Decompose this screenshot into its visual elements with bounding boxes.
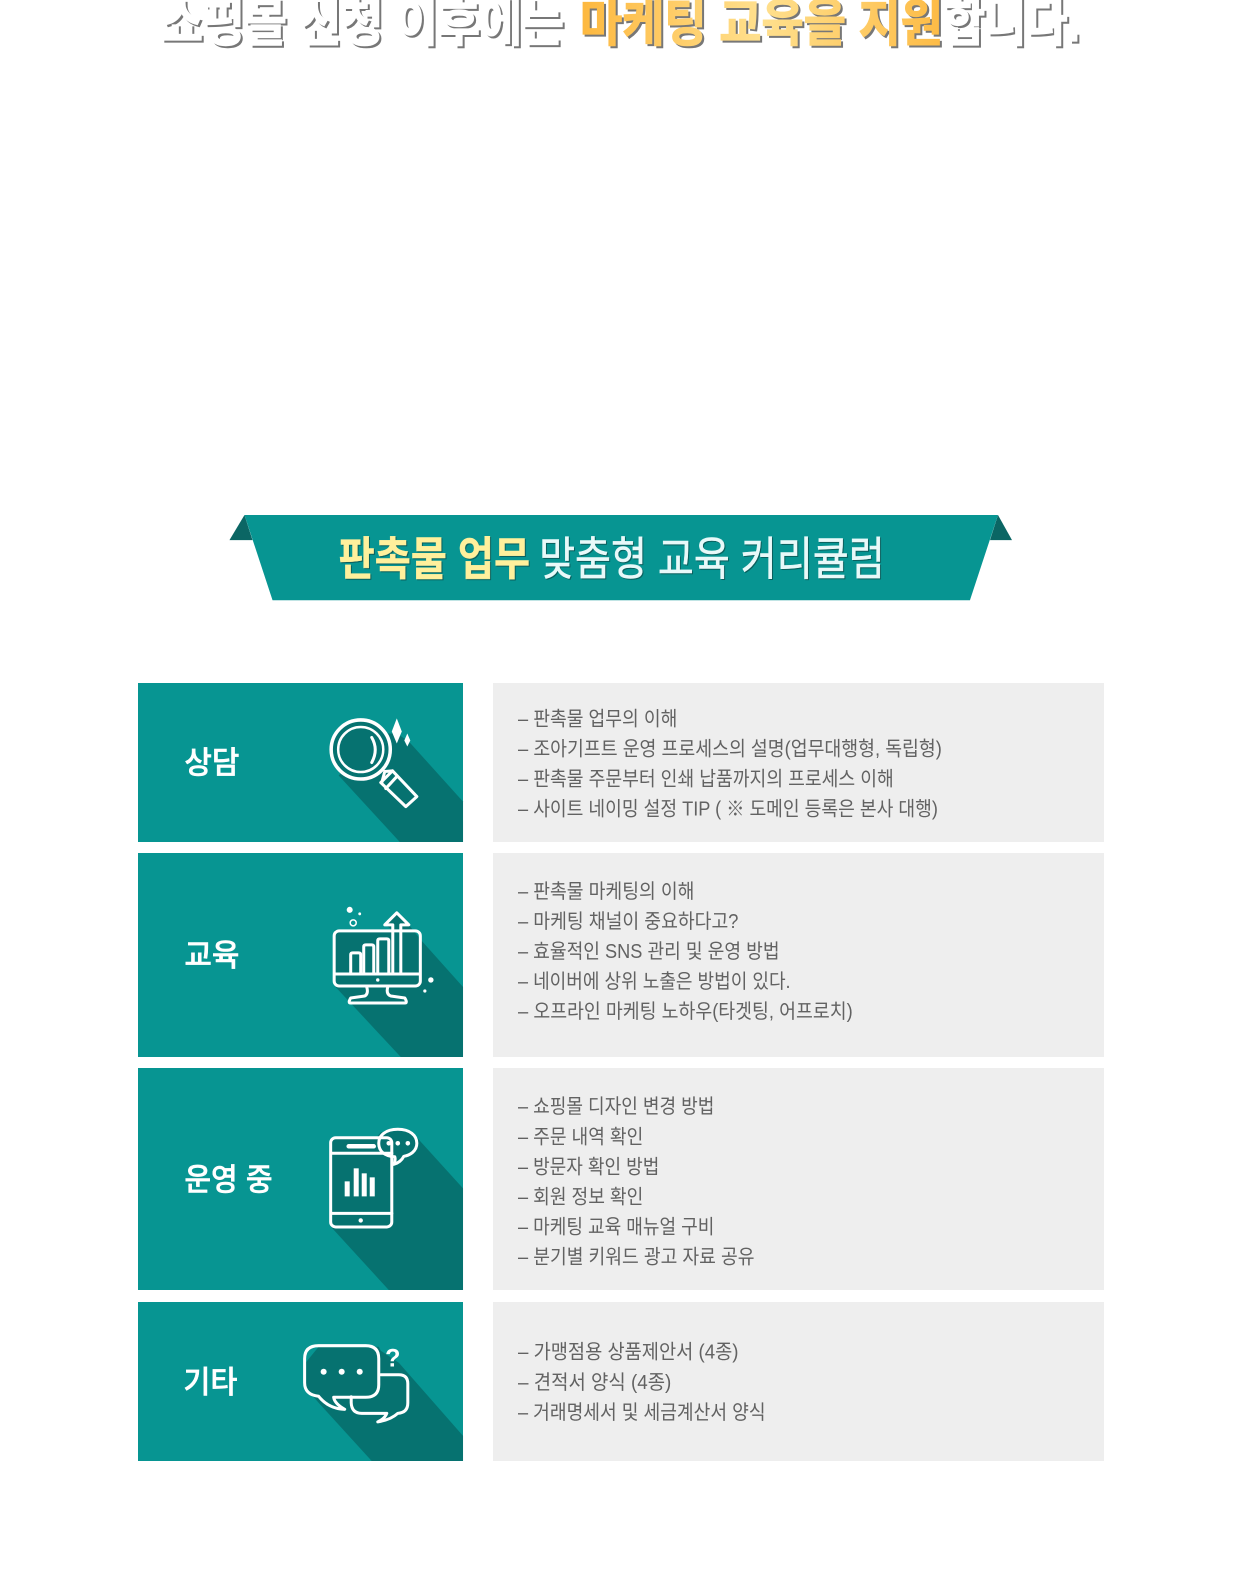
panel: 교육 list: – 오프라인 마케팅 노하우(타겟팅, 어프로치) — [518, 1000, 853, 1023]
icon: speech bubbles: ? — [385, 1345, 400, 1373]
panel: 교육 list: – 마케팅 채널이 중요하다고? — [518, 910, 738, 933]
panel: 기타 — [138, 1302, 463, 1461]
icon shadow — [335, 913, 463, 1057]
icon: magnifier — [331, 718, 417, 807]
panel: 상담 list: – 판촉물 업무의 이해 — [518, 707, 677, 730]
panel: 운영 중 list: – 방문자 확인 방법 — [518, 1155, 659, 1178]
panel: 상담 list: – 판촉물 주문부터 인쇄 납품까지의 프로세스 이해 — [518, 768, 894, 791]
panel: 운영 중 list: – 회원 정보 확인 — [518, 1185, 643, 1208]
panel: 운영 중 list: – 마케팅 교육 매뉴얼 구비 — [518, 1215, 714, 1238]
icon shadow — [306, 1347, 463, 1461]
panel: 교육 list: – 네이버에 상위 노출은 방법이 있다. — [518, 970, 791, 993]
icon: speech bubbles — [305, 1345, 408, 1422]
icon shadow — [331, 1128, 463, 1290]
panel: 운영 중 — [138, 1068, 463, 1290]
banner heading: 맞춤형 교육 커리큘럼 — [539, 533, 885, 585]
panel: 교육 — [138, 853, 463, 1057]
panel: 운영 중 list: – 분기별 키워드 광고 자료 공유 — [518, 1246, 755, 1269]
icon: phone with chat bubble — [331, 1129, 417, 1227]
panel: 운영 중 list: – 주문 내역 확인 — [518, 1125, 643, 1148]
panel: 운영 중 list — [493, 1068, 1104, 1290]
panel: 교육 list — [493, 853, 1104, 1057]
panel: 기타 list: – 거래명세서 및 세금계산서 양식 — [518, 1401, 766, 1424]
panel: 상담 list: – 조아기프트 운영 프로세스의 설명(업무대행형, 독립형) — [518, 738, 942, 761]
banner heading: 판촉물 업무 — [339, 533, 530, 585]
label: 상담: 상담 — [184, 746, 239, 781]
panel: 기타 list — [493, 1302, 1104, 1461]
label: 교육: 교육 — [184, 938, 239, 973]
panel: 상담 — [138, 683, 463, 842]
icon shadow — [339, 733, 463, 842]
panel: 교육 list: – 효율적인 SNS 관리 및 운영 방법 — [518, 940, 780, 963]
panel: 교육 list: – 판촉물 마케팅의 이해 — [518, 880, 694, 903]
panel: 상담 list: – 사이트 네이밍 설정 TIP ( ※ 도메인 등록은 본사 대행) — [518, 798, 938, 821]
label: 기타: 기타 — [183, 1365, 237, 1400]
banner heading — [339, 533, 885, 585]
panel: 운영 중 list: – 쇼핑몰 디자인 변경 방법 — [518, 1095, 714, 1118]
title — [161, 0, 1080, 52]
panel: 기타 list: – 가맹점용 상품제안서 (4종) — [518, 1341, 738, 1364]
banner ribbon — [229, 515, 1012, 600]
icon: monitor chart — [334, 907, 434, 1003]
panel: 기타 list: – 견적서 양식 (4종) — [518, 1371, 671, 1394]
panel: 상담 list — [493, 683, 1104, 842]
label: 운영 중: 운영 중 — [184, 1162, 273, 1197]
